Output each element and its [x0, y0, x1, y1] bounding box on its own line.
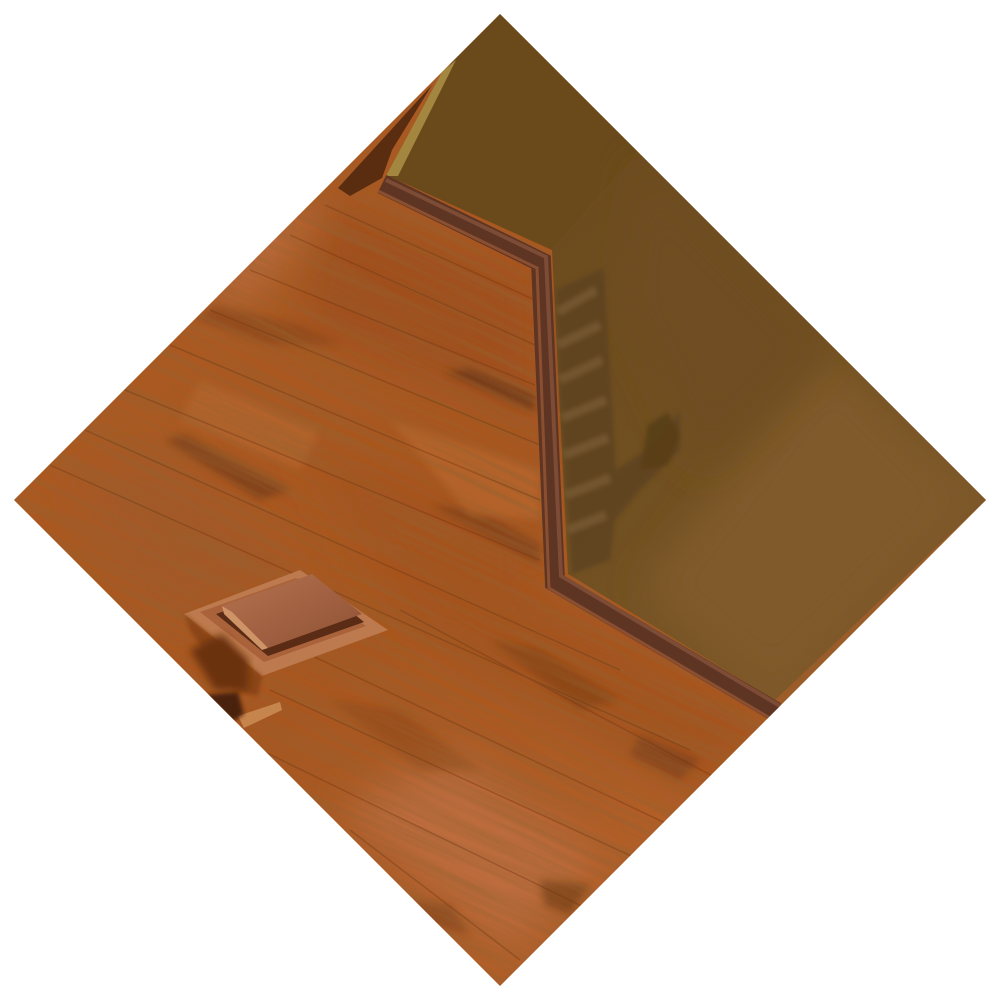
floor board seams: [50, 205, 720, 960]
floor vent register: [184, 570, 388, 728]
wall upper left section: [388, 14, 640, 250]
wall shadow of railing: [556, 268, 680, 574]
floor plank patches: [165, 305, 700, 935]
baseboard: [378, 180, 780, 718]
wall lower right section: [552, 150, 986, 700]
door frame edge and dark door casing: [338, 60, 456, 196]
